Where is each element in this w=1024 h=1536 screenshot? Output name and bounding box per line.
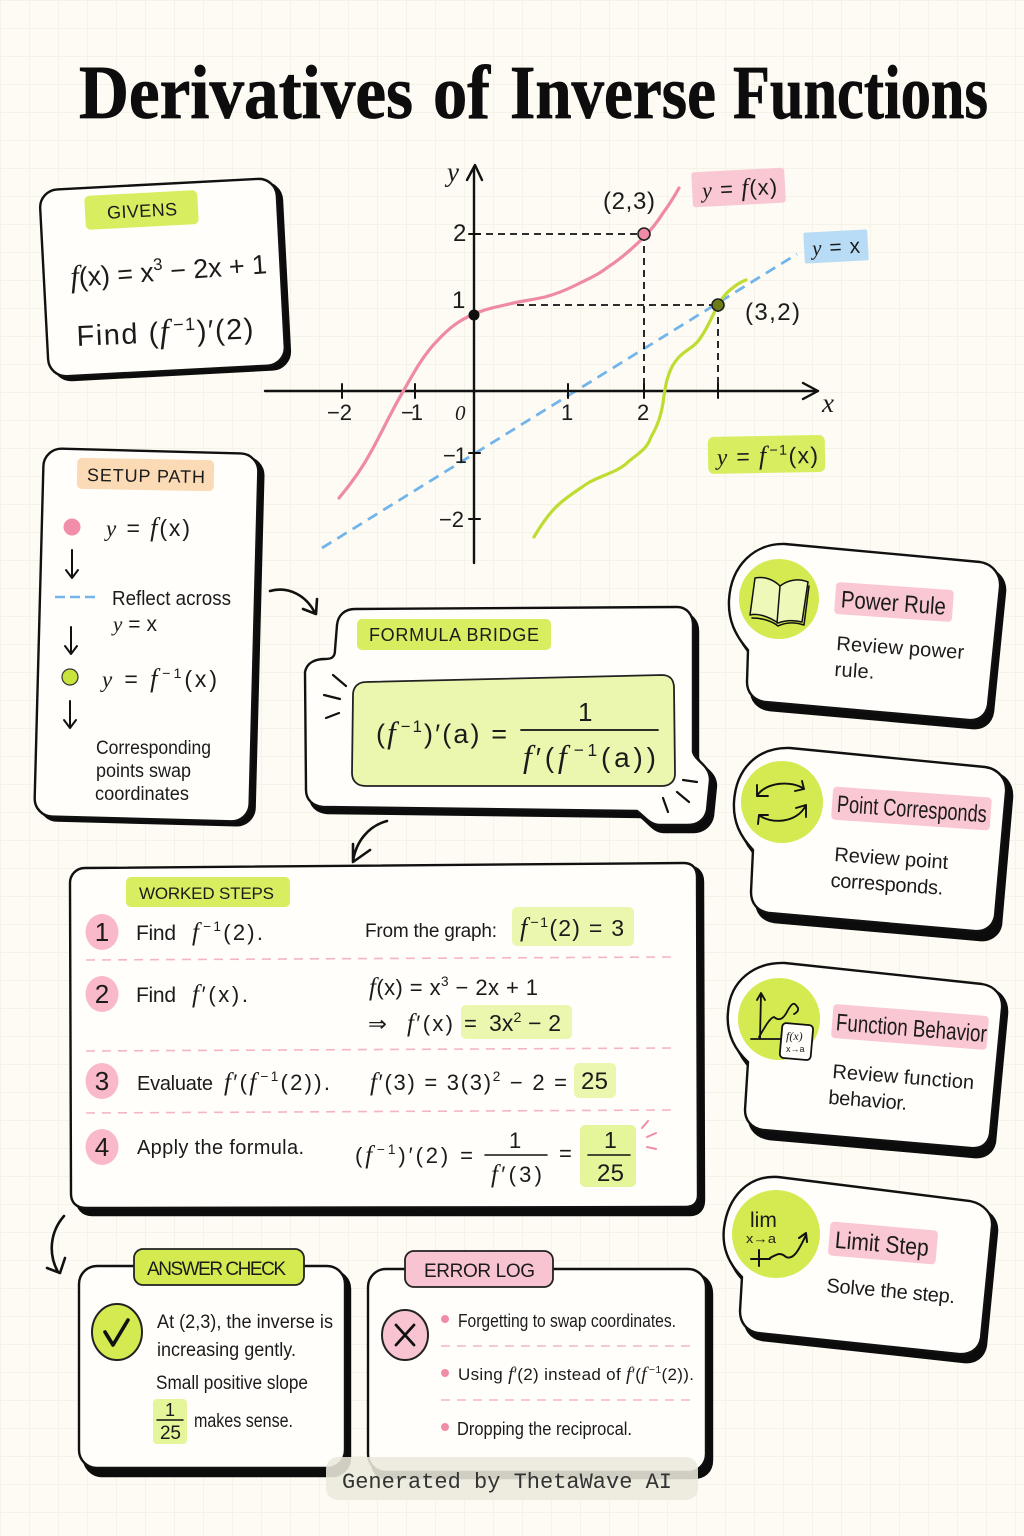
icon: function chart: x→a (786, 1044, 805, 1054)
icon: x mark (382, 1310, 428, 1360)
point: (2,3) on f (638, 228, 650, 240)
step 1: From the graph: (365, 921, 497, 942)
icon: limit: x→a (746, 1231, 777, 1246)
icon: check (92, 1304, 142, 1360)
title: Derivatives (79, 51, 413, 135)
step: inverse: −1 (162, 666, 182, 682)
axis labels: (2,3) (603, 188, 655, 215)
axis labels: (3,2) (745, 299, 800, 326)
legend tag: inverse: (x) (788, 442, 818, 469)
step: f (64, 513, 190, 542)
point: (3,2) on inverse (712, 299, 724, 311)
text: power rule description: Review power (836, 633, 965, 664)
icon: swap arrows (741, 761, 823, 843)
step 4: Apply the formula. (137, 1137, 304, 1159)
text: limit step description: Solve the step. (826, 1275, 956, 1308)
step 2 (86, 974, 572, 1039)
step 3: (2)). (281, 1070, 330, 1095)
step 3 (86, 1063, 616, 1099)
legend tag: y = x (803, 229, 869, 264)
text: answer explanation (153, 1312, 333, 1444)
heading: error log (405, 1251, 553, 1287)
error: wrong input: (2)). (662, 1365, 694, 1384)
text: find target: Find (f (76, 314, 170, 353)
step 1 (86, 907, 634, 950)
text: function definition: f(x) = x (69, 257, 155, 294)
step 2: ⇒ (368, 1013, 387, 1036)
text: function behavior description: behavior. (828, 1087, 908, 1115)
text: point corresponds description: Review point (834, 844, 949, 874)
text: answer explanation: Small positive slope (156, 1373, 308, 1394)
step 3: 3 (95, 1066, 109, 1096)
formula box: −1 (401, 717, 422, 736)
axis labels: 1 (452, 287, 465, 314)
step 1: −1 (203, 919, 221, 934)
tag: limit step: Limit Step (834, 1227, 930, 1262)
heading: givens: GIVENS (107, 199, 178, 223)
icon: limit (732, 1190, 820, 1278)
step: reflect (55, 588, 231, 636)
point: y-intercept (468, 310, 480, 320)
step 2: f(x) = x (369, 974, 441, 1001)
axis labels: 2 (637, 400, 649, 425)
heading: answer check (134, 1249, 304, 1285)
step 3: Evaluate (137, 1073, 213, 1095)
step 2: 3x (489, 1010, 513, 1036)
text: find target: −1 (173, 314, 195, 335)
formula box: (a)) (601, 742, 656, 773)
step 1: 1 (95, 917, 109, 947)
text: corresponding points: points swap (96, 761, 191, 782)
arrow: down 1 (66, 550, 78, 578)
title (79, 51, 988, 135)
axis labels: −1 (443, 443, 467, 468)
step 1: Find (136, 922, 176, 945)
text: answer explanation: At (2,3), the inverse is (157, 1312, 333, 1333)
step 1: f (520, 913, 531, 942)
text: find target: )′(2) (196, 313, 254, 348)
axis labels: 0 (455, 401, 466, 425)
step 3: −1 (260, 1069, 278, 1084)
step 3: f′(f (224, 1069, 256, 1096)
card: function behavior (728, 963, 1007, 1157)
text: answer explanation: 25 (160, 1423, 181, 1444)
error: swap: Forgetting to swap coordinates. (458, 1311, 676, 1331)
legend tag: y = x: y = x (809, 234, 861, 260)
panel: error log (368, 1251, 712, 1478)
text: corresponding points (95, 738, 211, 805)
text: power rule description (834, 633, 965, 690)
text: answer explanation: makes sense. (194, 1411, 293, 1432)
step 2: 2 (95, 979, 109, 1009)
icon: function chart (738, 978, 820, 1060)
step 4: 25 (597, 1160, 624, 1187)
text: function definition: 3 (152, 255, 163, 274)
heading: formula bridge (357, 619, 551, 650)
panel: formula bridge (305, 607, 716, 832)
step 4 (86, 1121, 656, 1188)
step 4: 4 (95, 1132, 109, 1162)
title: of (433, 51, 492, 135)
text: function behavior description (828, 1061, 975, 1120)
step 3: 25 (581, 1068, 608, 1095)
heading: error log: ERROR LOG (424, 1261, 535, 1282)
card: point corresponds (734, 748, 1012, 940)
text: corresponding points: coordinates (95, 784, 189, 805)
step: inverse: y = f (102, 664, 157, 693)
legend tag: inverse (708, 435, 825, 474)
heading: worked steps: WORKED STEPS (139, 884, 274, 903)
formula box: (f (376, 716, 396, 750)
chart: function and inverse graph (265, 157, 869, 563)
formula box: 1 (578, 697, 592, 727)
step 1: f (192, 919, 202, 946)
text: answer explanation: increasing gently. (157, 1340, 296, 1361)
heading: setup path (77, 458, 214, 491)
step: inverse: (x) (184, 666, 217, 692)
step 4: −1 (377, 1142, 395, 1157)
formula box: −1 (574, 740, 597, 760)
heading: worked steps (126, 877, 290, 907)
text: function definition: − 2x + 1 (162, 249, 268, 287)
axis labels (327, 157, 834, 532)
error: reciprocal: Dropping the reciprocal. (457, 1419, 632, 1439)
card: limit step (724, 1177, 997, 1362)
step: reflect: Reflect across (112, 588, 231, 610)
axis labels: −1 (401, 400, 423, 425)
title: Inverse (510, 51, 716, 135)
step 2: f′(x). (192, 981, 248, 1008)
heading: answer check: ANSWER CHECK (147, 1259, 286, 1280)
axis labels: 1 (561, 400, 573, 425)
icon: function chart: f(x) (786, 1029, 803, 1043)
arrow: down 2 (65, 627, 77, 654)
step 1: −1 (531, 915, 548, 931)
icon: book (739, 559, 819, 639)
step 3: f′(3) = 3(3) (370, 1069, 491, 1096)
legend tag: inverse: −1 (769, 443, 787, 459)
text: power rule description: rule. (834, 659, 875, 684)
step 2: f′(x) (407, 1010, 453, 1037)
heading: formula bridge: FORMULA BRIDGE (369, 625, 539, 645)
heading: givens (84, 190, 199, 230)
legend tag: y = f(x) (691, 168, 786, 207)
panel: setup path (34, 448, 264, 826)
text: function behavior description: Review function (832, 1061, 975, 1094)
step 2: 3 (441, 974, 449, 989)
step 2: − 2 (522, 1010, 561, 1036)
arrow: down 3 (64, 701, 76, 728)
step 4: 1 (604, 1127, 617, 1153)
arrow: setup to formula (270, 590, 317, 614)
footer: watermark (326, 1457, 698, 1500)
step 4: (f (355, 1142, 372, 1169)
formula box: f′(f (523, 739, 567, 774)
step 4: 1 (509, 1128, 521, 1153)
text: point corresponds description (830, 844, 949, 900)
legend tag: y = f(x): y = f(x) (699, 173, 778, 204)
panel: worked steps (70, 863, 704, 1215)
axis labels: −2 (327, 400, 352, 425)
step 2: = (464, 1011, 477, 1036)
error: wrong input: −1 (649, 1364, 661, 1376)
icon: limit: lim (750, 1209, 777, 1232)
axis labels: x (821, 388, 834, 418)
axis labels: 2 (453, 220, 466, 247)
card: power rule (729, 544, 1005, 728)
step 4: f′(3) (491, 1161, 542, 1188)
formula box (352, 675, 675, 786)
step 2: Find (136, 984, 176, 1007)
step: reflect: y = x (111, 612, 158, 636)
arrow: steps to answer (47, 1216, 65, 1273)
error: wrong input: Using f′(2) instead of f′(f (458, 1364, 647, 1385)
step 1: (2) = 3 (549, 915, 624, 941)
tag: power rule: Power Rule (840, 586, 947, 621)
footer: watermark: Generated by ThetaWave AI (342, 1470, 672, 1495)
heading: setup path: SETUP PATH (87, 465, 205, 487)
legend tag: inverse: y = f (717, 441, 766, 470)
step 2: 2 (514, 1010, 522, 1026)
text: corresponding points: Corresponding (96, 738, 211, 759)
axis labels: −2 (439, 507, 464, 532)
text: answer explanation: 1 (165, 1400, 175, 1420)
panel: answer check (79, 1249, 350, 1476)
arrow: formula to steps (353, 821, 387, 862)
burst marks (324, 675, 697, 812)
step 1: (2). (223, 920, 263, 945)
panel: givens (39, 178, 291, 381)
formula box: )′(a) = (424, 719, 507, 749)
text: point corresponds description: corresponds. (830, 870, 944, 900)
step: inverse (62, 664, 217, 693)
step 4: = (559, 1141, 572, 1166)
step 2: − 2x + 1 (449, 975, 538, 1000)
step: f: y = f(x) (104, 513, 190, 542)
step 3: − 2 = (502, 1070, 567, 1095)
step 3: 2 (493, 1069, 500, 1084)
step 4: )′(2) = (398, 1143, 473, 1168)
axis labels: y (444, 157, 459, 187)
